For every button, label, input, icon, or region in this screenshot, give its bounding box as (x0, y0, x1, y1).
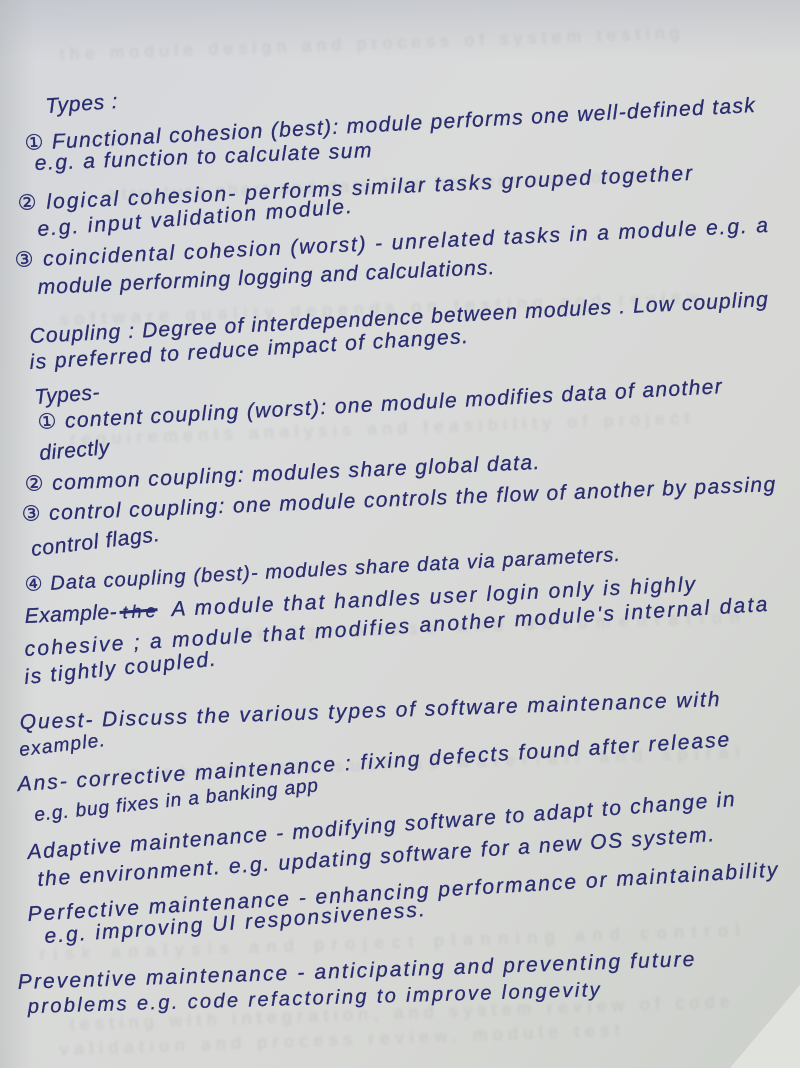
section: types of coupling: ② common coupling: modules share global data. (24, 451, 540, 496)
faint bleed-through writing from reverse side: software quality depends on testing and review (59, 288, 700, 329)
faint bleed-through writing from reverse side: validation and process review, module test (59, 1020, 620, 1059)
section: types of cohesion: e.g. a function to calculate sum (34, 139, 372, 175)
section: coupling definition: Coupling : Degree of interdependence between modules . Low coupling (29, 288, 769, 348)
section: types of cohesion: e.g. input validation module. (37, 195, 353, 241)
answer: preventive maintenance (17, 948, 695, 1018)
section: types of cohesion: ① Functional cohesion (best): module performs one well-defined task (24, 94, 757, 155)
answer: preventive maintenance: Preventive maintenance - anticipating and preventing future (17, 948, 695, 994)
section: example: is tightly coupled. (23, 648, 217, 689)
faint bleed-through writing from reverse side: testing with integration, and system review of code (69, 992, 730, 1034)
section: example: the (122, 601, 156, 622)
section: types of cohesion: ② logical cohesion- performs similar tasks grouped together (17, 162, 694, 215)
section: types of coupling: ③ control coupling: one module controls the flow of another by passing (21, 473, 776, 526)
answer: adaptive maintenance: the environment. e.g. updating software for a new OS system. (37, 823, 715, 891)
section: types of coupling: control flags. (30, 523, 161, 561)
answer: preventive maintenance: problems e.g. code refactoring to improve longevity (26, 979, 601, 1018)
answer: perfective maintenance: e.g. improving UI responsiveness. (44, 898, 425, 948)
section: example: cohesive ; a module that modifies another module's internal data (24, 593, 768, 661)
section: types of cohesion: ③ coincidental cohesion (worst) - unrelated tasks in a module e.g. a (14, 214, 768, 272)
section: types of coupling: ① content coupling (worst): one module modifies data of another (37, 375, 723, 434)
question 4 (18, 688, 720, 761)
section: types of cohesion: Types : (45, 90, 118, 118)
answer: perfective maintenance: Perfective maintenance - enhancing performance or maintainability (27, 858, 779, 926)
question 4: example. (18, 730, 106, 761)
faint bleed-through writing from reverse side: requirements analysis and feasibility of project (69, 408, 690, 449)
answer: corrective maintenance: Ans- corrective maintenance : fixing defects found after release (15, 728, 730, 796)
faint bleed-through writing from reverse side: the module design and process of system testing (59, 23, 680, 64)
faint bleed-through writing from reverse side: design phase and documentation (239, 608, 740, 644)
section: example: Example- (24, 601, 117, 628)
section: coupling definition: is preferred to reduce impact of changes. (29, 325, 469, 374)
section: types of coupling (21, 375, 776, 596)
answer: corrective maintenance: e.g. bug fixes in a banking app (33, 775, 319, 826)
faint bleed-through writing from reverse side: risk analysis and project planning and control (39, 921, 740, 964)
section: example (23, 573, 768, 689)
section: coupling definition (29, 288, 769, 374)
section: types of coupling: Types- (34, 381, 100, 409)
section: types of coupling: directly (38, 436, 112, 465)
answer: corrective maintenance (15, 728, 730, 826)
faint bleed-through writing from reverse side: structure chart and data flow between each of them (109, 165, 670, 204)
answer: adaptive maintenance: Adaptive maintenance - modifying software to adapt to change in (25, 788, 735, 864)
section: types of coupling: ④ Data coupling (best)- modules share data via parameters. (24, 544, 620, 596)
faint bleed-through writing from reverse side: process models such as waterfall and spiral (99, 743, 740, 784)
section: example: A module that handles user login only is highly (169, 573, 697, 621)
question 4: Quest- Discuss the various types of software maintenance with (19, 688, 720, 734)
section: types of cohesion: module performing logging and calculations. (37, 256, 495, 299)
section: types of cohesion (14, 90, 768, 299)
